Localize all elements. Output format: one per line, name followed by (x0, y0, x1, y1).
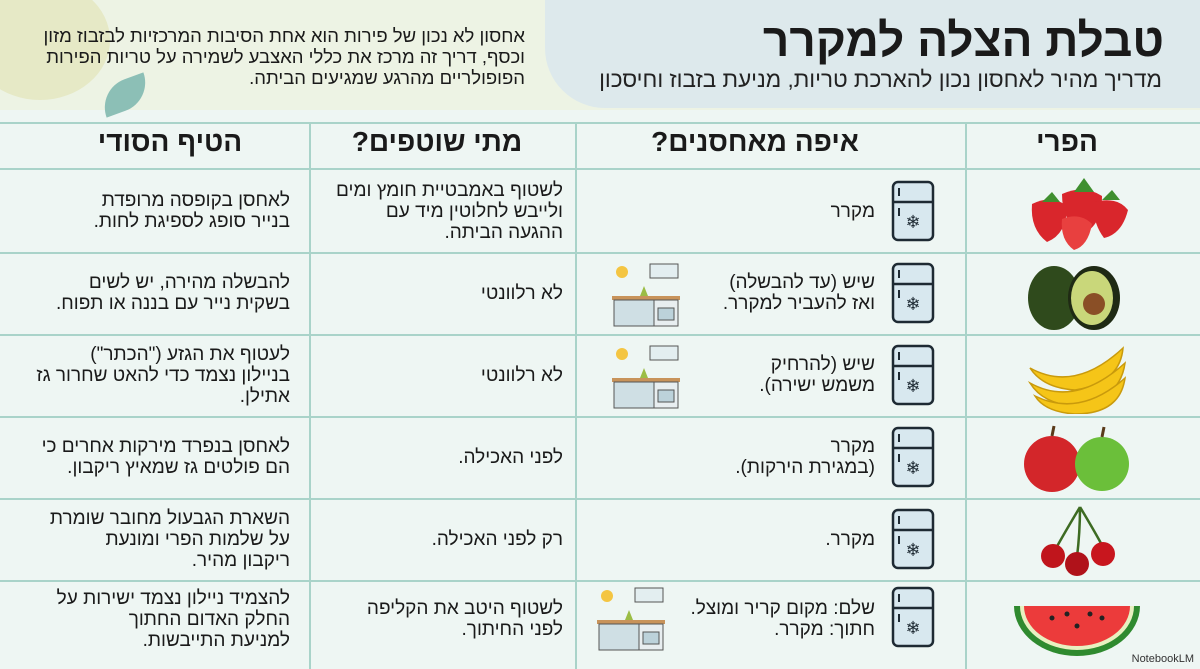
icon: avocado (1028, 266, 1120, 330)
row 3 banana: לעטוף את הגזע ("הכתר") (90, 344, 290, 364)
subtitle: מדריך מהיר לאחסון נכון להארכת טריות, מניעת בזבוז וחיסכון (599, 67, 1162, 92)
row 2 avocado: שיש (עד להבשלה) (729, 272, 875, 293)
row 1 strawberry: ולייבש לחלוטין מיד עם (386, 200, 563, 222)
icon: cherries (1041, 506, 1115, 576)
header: when wash: מתי שוטפים? (352, 126, 522, 157)
icon: kitchen (597, 588, 665, 650)
row 5 cherries: ריקבון מהיר. (192, 550, 290, 570)
row 4 apples: מקרר (831, 436, 875, 457)
icon: fridge: ❄ (905, 212, 921, 232)
row 3 banana: משמש ישירה). (759, 375, 875, 396)
title: טבלת הצלה למקרר (763, 14, 1164, 66)
row 6 watermelon: חתוך: מקרר. (774, 619, 875, 640)
row 2 avocado: בשקית נייר עם בננה או תפוח. (56, 293, 290, 314)
row 3 banana: שיש (להרחיק (771, 354, 875, 375)
icon: kitchen (612, 264, 680, 326)
row 4 apples: לפני האכילה. (458, 446, 563, 468)
icon: fridge: ❄ (905, 458, 921, 478)
row 2 avocado: להבשלה מהירה, יש לשים (89, 272, 290, 293)
row 3 banana: לא רלוונטי (481, 364, 563, 386)
row 6 watermelon: להצמיד ניילון נצמד ישירות על (57, 588, 290, 608)
row 4 apples: הם פולטים גז שמאיץ ריקבון. (67, 457, 290, 478)
row 1 strawberry: לשטוף באמבטיית חומץ ומים (336, 180, 563, 200)
row 6 watermelon: למניעת התייבשות. (143, 630, 290, 650)
icon: fridge: ❄ (905, 540, 921, 560)
icon: fridge (892, 262, 934, 324)
row 4 apples: (במגירת הירקות). (735, 457, 875, 478)
icon: watermelon (1014, 606, 1140, 656)
row 2 avocado: לא רלוונטי (481, 282, 563, 304)
icon: fridge (892, 508, 934, 570)
row 1 strawberry: ההגעה הביתה. (444, 222, 563, 242)
row 6 watermelon: החלק האדום החתוך (129, 608, 290, 630)
row 6 watermelon: לפני החיתוך. (462, 619, 563, 640)
row 4 apples: לאחסן בנפרד מירקות אחרים כי (42, 436, 290, 457)
intro text block: וכסף, דריך זה מרכז את כללי האצבע לשמירה על טריות הפירות (46, 46, 525, 67)
intro text block (43, 25, 525, 88)
row 2 avocado (56, 262, 1120, 330)
icon: fridge (892, 180, 934, 242)
row 3 banana (36, 344, 1126, 414)
icon: apples (1024, 426, 1129, 492)
icon: fridge (892, 426, 934, 488)
icon: kitchen (612, 346, 680, 408)
row 5 cherries (50, 506, 1115, 576)
row 1 strawberry: בנייר סופג לספיגת לחות. (94, 211, 290, 232)
intro text block: אחסון לא נכון של פירות הוא אחת הסיבות המרכזיות לבזבוז מזון (43, 25, 525, 46)
row 5 cherries: רק לפני האכילה. (432, 528, 563, 550)
icon: fridge (892, 586, 934, 648)
row 5 cherries: מקרר. (825, 528, 875, 550)
row 6 watermelon: לשטוף היטב את הקליפה (367, 598, 563, 619)
icon: fridge: ❄ (905, 294, 921, 314)
row 3 banana: בניילון נצמד כדי להאט שחרור גז (36, 364, 290, 386)
header: fruit: הפרי (1036, 126, 1098, 157)
row 6 watermelon (57, 586, 1140, 656)
row 5 cherries: על שלמות הפרי ומונעת (106, 528, 290, 550)
icon: strawberries (1032, 178, 1128, 250)
icon: fridge: ❄ (905, 376, 921, 396)
icon: bananas (1028, 346, 1126, 414)
row 5 cherries: השארת הגבעול מחובר שומרת (50, 508, 290, 528)
header background (0, 0, 1200, 110)
header: secret tip: הטיף הסודי (98, 126, 242, 157)
header: where: איפה מאחסנים? (651, 126, 859, 157)
row 4 apples (42, 426, 1129, 492)
row 1 strawberry: לאחסן בקופסה מרופדת (102, 190, 290, 211)
watermark: NotebookLM (1132, 653, 1194, 665)
intro text block: הפופולריים מהרגע שמגיעים הביתה. (249, 67, 525, 88)
row 2 avocado: ואז להעביר למקרר. (723, 293, 875, 314)
row 1 strawberry: מקרר (831, 200, 875, 222)
icon: fridge: ❄ (905, 618, 921, 638)
row 1 strawberry (94, 178, 1128, 250)
row 6 watermelon: שלם: מקום קריר ומוצל. (690, 598, 875, 619)
row 3 banana: אתילן. (240, 386, 290, 406)
icon: fridge (892, 344, 934, 406)
